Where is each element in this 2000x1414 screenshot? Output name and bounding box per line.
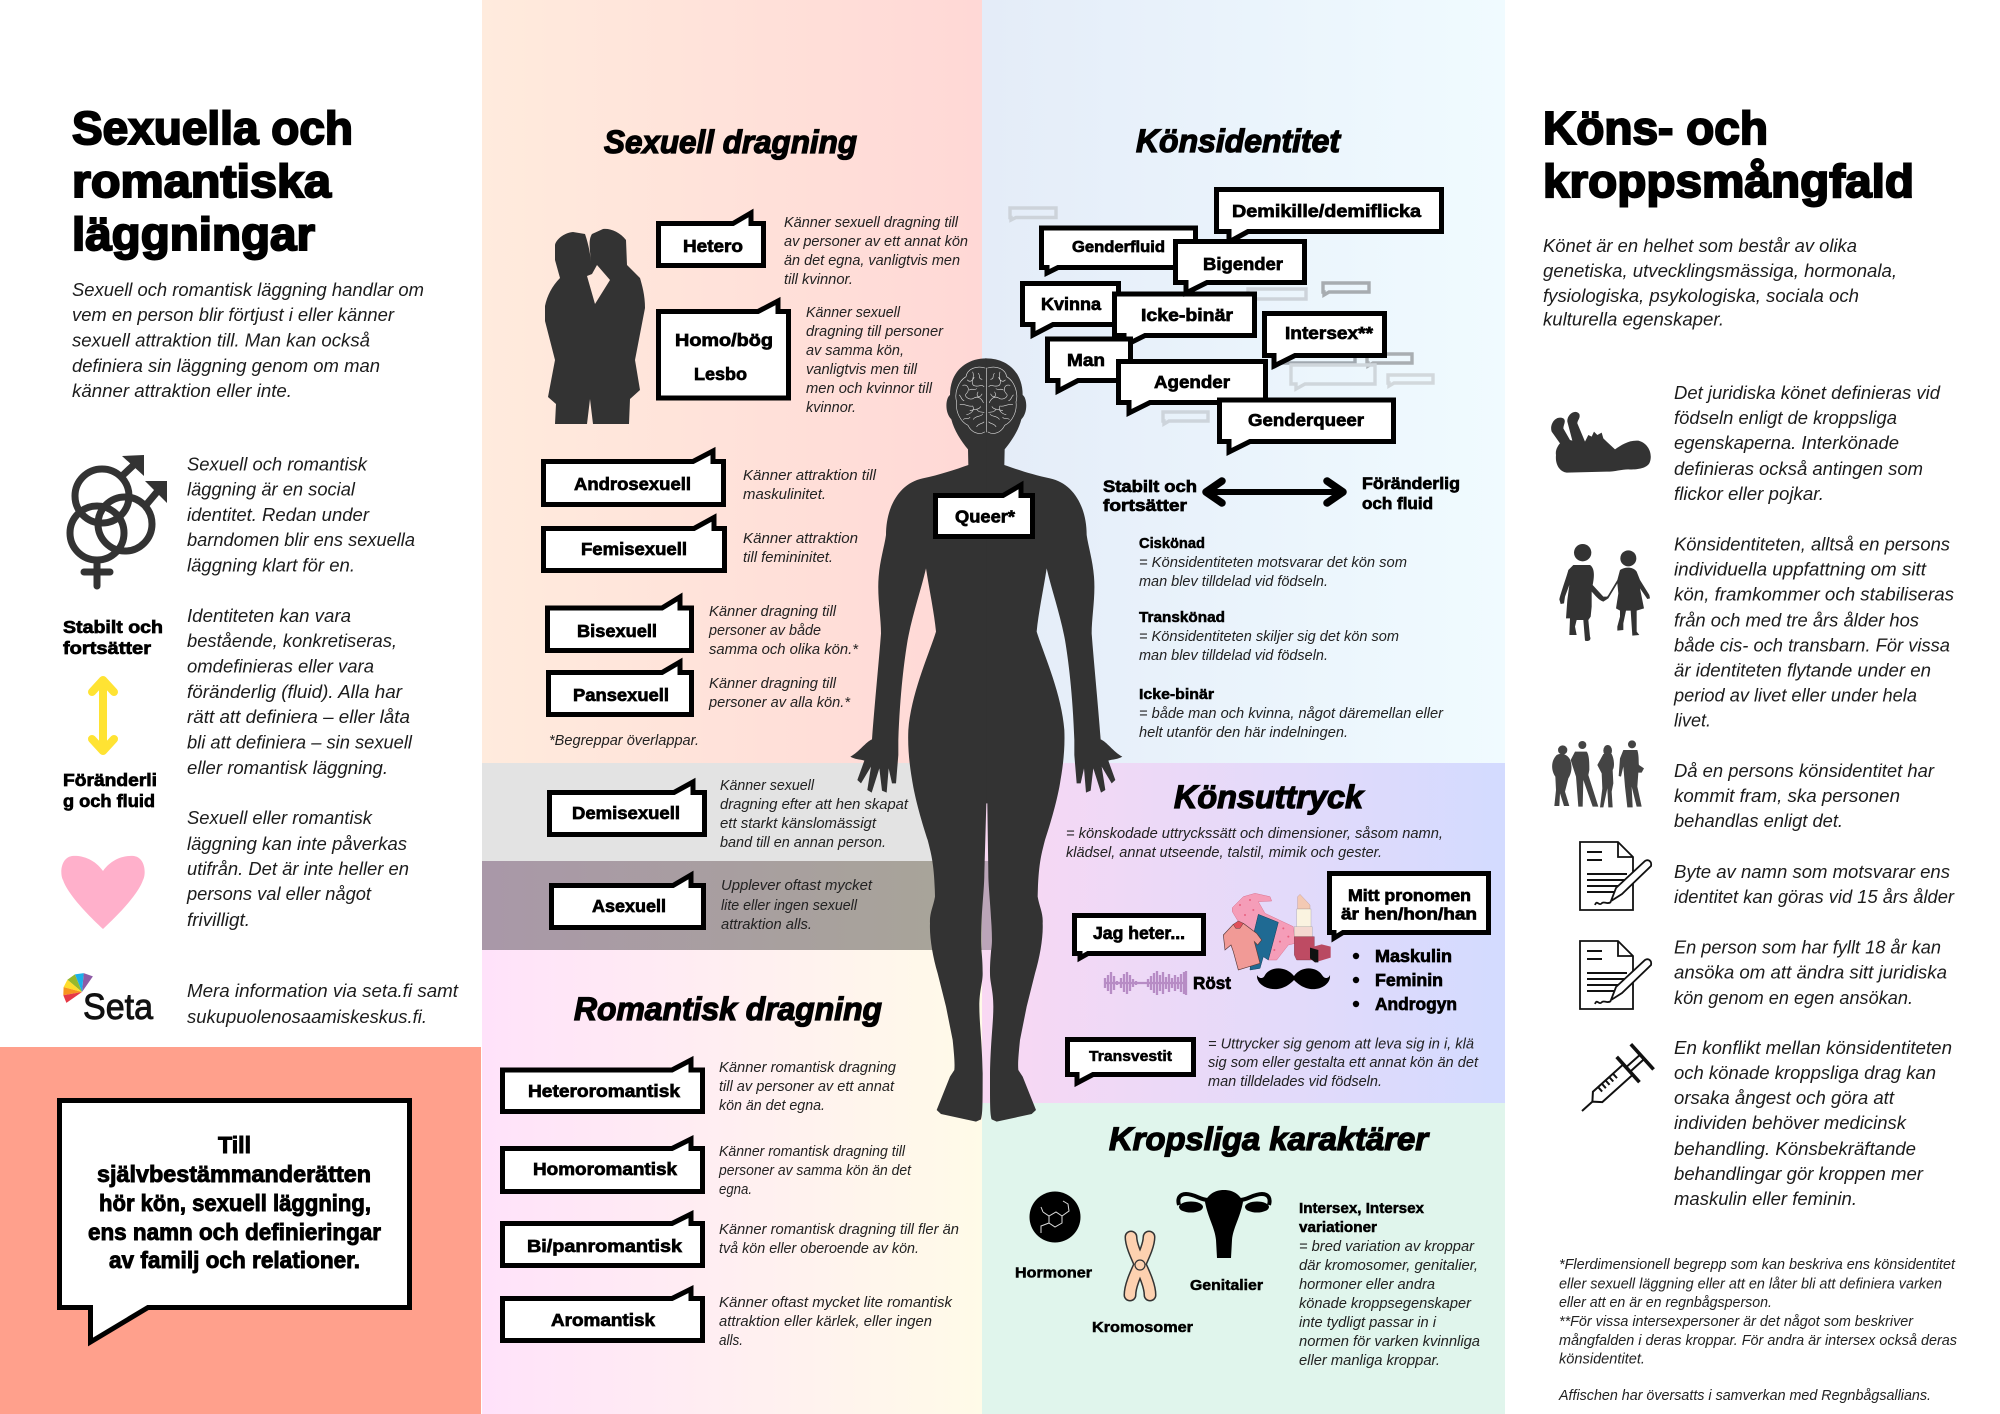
- text block: intro right: genetiska, utvecklingsmässiga, hormonala,: [1543, 261, 1897, 281]
- bubble: Transvestit: [1068, 1040, 1194, 1083]
- list: expression types: Feminin: [1375, 970, 1443, 990]
- text: Pansexuell description: personer av alla kön.*: [708, 695, 851, 711]
- text block: treatment: kommit fram, ska personen: [1674, 786, 1900, 806]
- text block: gender confirming treatment: individen behöver medicinsk: [1674, 1113, 1907, 1133]
- text block: gender identity: är identiteten flytande under en: [1674, 660, 1931, 680]
- footnotes: *Flerdimensionell begrepp som kan beskriva ens könsidentitet: [1559, 1257, 1956, 1273]
- text block: intro right: kulturella egenskaper.: [1543, 310, 1724, 330]
- text: Aromantisk description: alls.: [719, 1333, 743, 1349]
- heading: Sexuell dragning: Sexuell dragning: [604, 124, 857, 160]
- text: Demisexuell description: dragning efter att hen skapat: [720, 797, 909, 813]
- bubble: Asexuell: Asexuell: [592, 896, 666, 916]
- text block: intro left: Sexuell och romantisk läggning handlar om: [72, 280, 424, 300]
- text: intersex definition: inte tydligt passar in i: [1299, 1315, 1437, 1331]
- text block: cannot be influenced: läggning kan inte påverkas: [187, 834, 407, 854]
- text: Bisexuell description: [708, 604, 859, 658]
- text: Pansexuell description: Känner dragning till: [709, 676, 837, 692]
- bubble: Aromantisk: [502, 1289, 702, 1340]
- callout: self-determination: [60, 1100, 410, 1342]
- text block: social identity: [187, 454, 415, 576]
- text block: identity can vary: Identiteten kan vara: [187, 606, 351, 626]
- bubble: Bi/panromantisk: [502, 1214, 702, 1266]
- definition: Icke-binär: Icke-binär: [1139, 687, 1214, 703]
- footnotes: Affischen har översatts i samverkan med Regnbågsallians.: [1558, 1388, 1931, 1404]
- title: left column: läggningar: [72, 208, 315, 260]
- footnote: overlapping terms: *Begreppar överlappar.: [549, 733, 699, 749]
- text block: social identity: barndomen blir ens sexuella: [187, 530, 415, 550]
- arrow: yellow double arrow: [92, 680, 114, 751]
- footnotes: **För vissa intersexpersoner är det något som beskriver: [1559, 1314, 1914, 1330]
- bubble: Queer: Queer*: [955, 506, 1015, 526]
- text: intersex definition: [1299, 1201, 1480, 1369]
- text: Femisexuell description: [743, 531, 858, 566]
- label: Hormoner: Hormoner: [1015, 1266, 1092, 1282]
- bubble: Homoromantisk: [502, 1139, 702, 1192]
- bubble: Asexuell: [552, 875, 704, 928]
- text: Hetero description: än det egna, vanligtvis men: [784, 253, 960, 269]
- bubble: Icke-binär: Icke-binär: [1141, 305, 1233, 325]
- label: stable: [63, 617, 163, 658]
- text block: name change: [1674, 862, 1955, 907]
- panel: demisexual band: [482, 763, 982, 861]
- bubble: Man: Man: [1067, 350, 1105, 370]
- text: Hetero description: Känner sexuell dragning till: [784, 215, 959, 231]
- bubble: Femisexuell: [544, 518, 724, 570]
- text: Androsexuell description: Känner attraktion till: [743, 468, 877, 484]
- bubble: Homo/bög Lesbo: [658, 301, 788, 398]
- label: fluid: [63, 770, 157, 811]
- text: Bi/panromantisk description: [719, 1222, 959, 1257]
- text block: legal gender: [1674, 383, 1941, 504]
- text block: social identity: Sexuell och romantisk: [187, 454, 368, 474]
- text block: identity can vary: bli att definiera – sin sexuell: [187, 732, 413, 752]
- arrow: black double arrow: [1206, 481, 1343, 503]
- text block: intro left: vem en person blir förtjust i eller känner: [72, 305, 395, 325]
- heading: Kropsliga karaktärer: Kropsliga karaktärer: [1109, 1121, 1430, 1157]
- text block: intro left: sexuell attraktion till. Man kan också: [72, 330, 370, 350]
- panel: salmon callout background: [0, 1047, 481, 1414]
- text: intersex definition: Intersex, Intersex: [1299, 1201, 1424, 1217]
- text: gender expression definition: = könskodade uttryckssätt och dimensioner, såsom namn,: [1066, 826, 1443, 842]
- list: expression types: [1353, 946, 1457, 1014]
- title: right column: kroppsmångfald: [1543, 155, 1914, 207]
- text block: legal gender: Det juridiska könet definieras vid: [1674, 383, 1941, 403]
- bubble: Queer: [936, 485, 1032, 536]
- text: Hetero description: [784, 215, 968, 288]
- text block: name change: Byte av namn som motsvarar ens: [1674, 862, 1950, 882]
- text: intersex definition: könade kroppsegenskaper: [1299, 1296, 1472, 1312]
- bubble: Heteroromantisk: Heteroromantisk: [528, 1081, 680, 1101]
- text: Homo description: [806, 305, 944, 416]
- text: Femisexuell description: till femininitet.: [743, 550, 833, 566]
- bubble: Jag heter: Jag heter...: [1093, 923, 1185, 943]
- icon: document with pen: [1580, 842, 1651, 910]
- text: intersex definition: hormoner eller andra: [1299, 1277, 1435, 1293]
- panel: bodily characteristics background: [982, 1103, 1505, 1414]
- definition: Icke-binär: helt utanför den här indelningen.: [1139, 725, 1348, 741]
- text block: intro right: [1543, 236, 1897, 330]
- text: intersex definition: normen för varken kvinnliga: [1299, 1334, 1480, 1350]
- text: intersex definition: där kromosomer, genitalier,: [1299, 1258, 1478, 1274]
- text: Demisexuell description: ett starkt känslomässigt: [720, 816, 877, 832]
- text block: legal gender application: En person som har fyllt 18 år kan: [1674, 938, 1941, 958]
- definition: Transkönad: man blev tilldelad vid födseln.: [1139, 648, 1328, 664]
- bubble: Pansexuell: [548, 662, 692, 714]
- text: Asexuell description: attraktion alls.: [721, 917, 812, 933]
- text: Androsexuell description: [743, 468, 877, 503]
- bubble: Homo/bög Lesbo: Homo/bög: [675, 330, 773, 350]
- footnotes: eller att en är en regnbågsperson.: [1559, 1295, 1772, 1311]
- text block: cannot be influenced: [186, 808, 409, 930]
- list: expression types: Androgyn: [1375, 994, 1457, 1014]
- text block: intro left: [72, 280, 424, 401]
- text: Demisexuell description: band till en annan person.: [720, 835, 886, 851]
- panel: gender identity background: [982, 0, 1505, 763]
- definition: Ciskönad: Ciskönad: [1139, 536, 1205, 552]
- list: expression types: Maskulin: [1375, 946, 1452, 966]
- text: Homoromantisk description: personer av samma kön än det: [718, 1163, 912, 1179]
- bubble: Genderfluid: [1042, 228, 1196, 273]
- logo: Seta: Seta: [83, 986, 154, 1027]
- bubble: Genderqueer: Genderqueer: [1248, 410, 1364, 430]
- text block: legal gender: flickor eller pojkar.: [1674, 484, 1824, 504]
- icon: brain: [956, 367, 1017, 433]
- text: Homoromantisk description: [718, 1144, 912, 1198]
- bubble: Agender: Agender: [1154, 372, 1230, 392]
- icon: baby: [1551, 412, 1651, 473]
- text: Bisexuell description: Känner dragning till: [709, 604, 837, 620]
- text block: identity can vary: eller romantisk läggning.: [187, 758, 388, 778]
- text: Transvestit description: = Uttrycker sig genom att leva sig in i, klä: [1208, 1036, 1474, 1052]
- text: Homo description: Känner sexuell: [806, 305, 901, 321]
- text block: intro right: fysiologiska, psykologiska, sociala och: [1543, 286, 1859, 306]
- label: fluid identity: [1362, 475, 1460, 513]
- text block: gender identity: livet.: [1674, 710, 1711, 730]
- bubble: Icke-binär: [1114, 294, 1254, 346]
- heading: Könsidentitet: Könsidentitet: [1136, 123, 1341, 159]
- label: Röst: Röst: [1193, 973, 1231, 993]
- text block: intro right: Könet är en helhet som består av olika: [1543, 236, 1857, 256]
- bubble: Demikille/demiflicka: [1216, 190, 1442, 242]
- heading: Romantisk dragning: Romantisk dragning: [574, 991, 882, 1027]
- bubble: Androsexuell: [544, 451, 724, 504]
- label: stable identity: Stabilt och: [1103, 478, 1197, 496]
- text block: gender confirming treatment: [1674, 1038, 1952, 1209]
- label: fluid: Föränderli: [63, 770, 157, 790]
- label: stable: fortsätter: [63, 638, 151, 658]
- ghost speech bubbles: [1010, 208, 1433, 424]
- bubble: Man: [1048, 339, 1130, 391]
- text block: gender identity: individuella uppfattning om sitt: [1674, 560, 1927, 580]
- text block: cannot be influenced: Sexuell eller romantisk: [187, 808, 373, 828]
- text block: legal gender application: [1674, 938, 1947, 1008]
- callout: self-determination: Till: [218, 1132, 251, 1158]
- bubble: Demisexuell: Demisexuell: [572, 803, 680, 823]
- text: Heteroromantisk description: [719, 1060, 896, 1114]
- panel: romantic attraction background: [482, 950, 982, 1414]
- label: stable identity: fortsätter: [1103, 497, 1188, 515]
- bubble: Demikille/demiflicka: Demikille/demiflicka: [1232, 201, 1421, 221]
- text block: legal gender: egenskaperna. Interkönade: [1674, 433, 1899, 453]
- title: right column: Köns- och: [1543, 102, 1768, 154]
- bubble: Homoromantisk: Homoromantisk: [533, 1159, 677, 1179]
- callout: self-determination: hör kön, sexuell läggning,: [99, 1190, 371, 1216]
- text block: identity can vary: rätt att definiera – eller låta: [187, 707, 410, 727]
- text: Pansexuell description: [708, 676, 851, 711]
- footnotes: eller sexuell läggning eller att en låter bli att definiera varken: [1559, 1276, 1942, 1292]
- text block: social identity: identitet. Redan under: [187, 505, 370, 525]
- footnotes: [1558, 1257, 1957, 1404]
- icon: gender symbols: [70, 455, 167, 586]
- footnotes: könsidentitet.: [1559, 1352, 1645, 1368]
- text: intersex definition: eller manliga kroppar.: [1299, 1353, 1440, 1369]
- text: Aromantisk description: Känner oftast mycket lite romantisk: [719, 1295, 953, 1311]
- text: Homo description: vanligtvis men till: [806, 362, 918, 378]
- text block: legal gender application: kön genom en egen ansökan.: [1674, 988, 1913, 1008]
- asexual band between legs: [982, 861, 991, 950]
- text: gender expression definition: [1066, 826, 1443, 861]
- icon: hormone molecule: [1030, 1192, 1080, 1242]
- text: gender expression definition: klädsel, annat utseende, talstil, mimik och gester.: [1066, 845, 1382, 861]
- text block: more information: Mera information via seta.fi samt: [187, 981, 459, 1001]
- bubble: Aromantisk: Aromantisk: [551, 1310, 655, 1330]
- text block: identity can vary: föränderlig (fluid). Alla har: [187, 682, 403, 702]
- bubble: Kvinna: Kvinna: [1041, 294, 1101, 314]
- bubble: Androsexuell: Androsexuell: [574, 474, 691, 494]
- label: Kromosomer: Kromosomer: [1092, 1320, 1193, 1336]
- icon: voice waveform: [1104, 971, 1187, 995]
- icon: children holding hands: [1559, 544, 1650, 641]
- text block: treatment: Då en persons könsidentitet har: [1674, 761, 1935, 781]
- heading: Könsuttryck: Könsuttryck: [1174, 779, 1365, 815]
- text: Hetero description: av personer av ett annat kön: [784, 234, 968, 250]
- text block: identity can vary: omdefinieras eller vara: [187, 656, 374, 676]
- text: Homo description: men och kvinnor till: [806, 381, 933, 397]
- bubble: Homo/bög Lesbo: Lesbo: [694, 364, 747, 384]
- icon: document with pen second: [1580, 941, 1651, 1009]
- bubble: Femisexuell: Femisexuell: [581, 539, 687, 559]
- text block: social identity: läggning är en social: [187, 480, 356, 500]
- text: Asexuell description: [721, 878, 873, 933]
- text block: name change: identitet kan göras vid 15 års ålder: [1674, 887, 1955, 907]
- text block: gender confirming treatment: En konflikt mellan könsidentiteten: [1674, 1038, 1952, 1058]
- bubble: Demisexuell: [550, 782, 704, 834]
- text: Bisexuell description: samma och olika kön.*: [709, 642, 859, 658]
- text: Androsexuell description: maskulinitet.: [743, 487, 826, 503]
- bubble: Pansexuell: Pansexuell: [573, 685, 669, 705]
- bubble: Bigender: Bigender: [1203, 254, 1283, 274]
- text block: cannot be influenced: persons val eller något: [186, 884, 372, 904]
- logo: Seta: [63, 973, 154, 1027]
- text block: legal gender application: ansöka om att ändra sitt juridiska: [1674, 962, 1947, 982]
- bubble: Mitt pronomen: [1330, 874, 1488, 938]
- text: Bi/panromantisk description: två kön eller oberoende av kön.: [719, 1241, 919, 1257]
- text block: gender identity: Könsidentiteten, alltså en persons: [1674, 534, 1950, 554]
- title: left column: [72, 102, 353, 260]
- callout: self-determination: av familj och relationer.: [109, 1247, 360, 1273]
- definition: Transkönad: [1139, 610, 1399, 664]
- bubble: Intersex**: Intersex**: [1285, 323, 1373, 343]
- bubble: Bisexuell: [548, 597, 692, 650]
- text: Heteroromantisk description: Känner romantisk dragning: [719, 1060, 896, 1076]
- text: Aromantisk description: attraktion eller kärlek, eller ingen: [719, 1314, 932, 1330]
- text block: intro left: känner attraktion eller inte.: [72, 381, 292, 401]
- text: Demisexuell description: Känner sexuell: [720, 778, 815, 794]
- text block: legal gender: födseln enligt de kroppsliga: [1674, 408, 1897, 428]
- label: Genitalier: Genitalier: [1190, 1278, 1263, 1294]
- text: Heteroromantisk description: till av personer av ett annat: [719, 1079, 895, 1095]
- panel: gender expression background: [982, 763, 1505, 1103]
- text block: social identity: läggning klart för en.: [187, 556, 355, 576]
- callout: self-determination: självbestämmanderätten: [97, 1161, 371, 1187]
- text: Asexuell description: Upplever oftast mycket: [721, 878, 873, 894]
- definition: Ciskönad: [1139, 536, 1407, 590]
- bubble: Hetero: Hetero: [683, 236, 743, 256]
- bubble: Bigender: [1176, 242, 1304, 293]
- body silhouette: [850, 358, 1122, 1122]
- text block: treatment: behandlas enligt det.: [1674, 811, 1843, 831]
- text block: gender identity: kön, framkommer och stabiliseras: [1674, 584, 1954, 604]
- definition: Icke-binär: = både man och kvinna, något däremellan eller: [1139, 706, 1444, 722]
- callout: self-determination: ens namn och definieringar: [88, 1219, 381, 1245]
- bubble: Mitt pronomen: är hen/hon/han: [1341, 906, 1477, 924]
- label: stable: Stabilt och: [63, 617, 163, 637]
- bubble: Heteroromantisk: [502, 1060, 702, 1112]
- definition: Ciskönad: man blev tilldelad vid födseln.: [1139, 574, 1328, 590]
- text block: gender identity: [1673, 534, 1954, 730]
- text: Transvestit description: sig som eller gestalta ett annat kön än det: [1208, 1055, 1479, 1071]
- text block: gender identity: period av livet eller under hela: [1673, 686, 1917, 706]
- text: intersex definition: variationer: [1299, 1220, 1377, 1236]
- text: Homo description: av samma kön,: [806, 343, 904, 359]
- definition: Transkönad: = Könsidentiteten skiljer sig det kön som: [1139, 629, 1399, 645]
- bubble: Intersex**: [1264, 314, 1384, 366]
- text: Femisexuell description: Känner attraktion: [743, 531, 858, 547]
- text: Heteroromantisk description: kön än det egna.: [719, 1098, 825, 1114]
- text block: cannot be influenced: frivilligt.: [187, 910, 250, 930]
- bubble: Hetero: [658, 213, 764, 266]
- icon: group of people: [1552, 740, 1644, 807]
- text: Bi/panromantisk description: Känner romantisk dragning till fler än: [719, 1222, 959, 1238]
- text block: gender confirming treatment: behandlingar gör kroppen mer: [1674, 1164, 1924, 1184]
- definition: Transkönad: Transkönad: [1139, 610, 1225, 626]
- label: fluid identity: och fluid: [1362, 495, 1433, 513]
- icon: syringe: [1571, 1044, 1654, 1124]
- text: Homo description: kvinnor.: [806, 400, 856, 416]
- icon: kissing couple silhouette: [545, 229, 645, 424]
- text: Homoromantisk description: Känner romantisk dragning till: [719, 1144, 906, 1160]
- text block: legal gender: definieras också antingen som: [1674, 459, 1923, 479]
- text block: gender confirming treatment: och könade kroppsliga drag kan: [1674, 1063, 1936, 1083]
- footnotes: mångfalden i deras kroppar. För andra är intersex också deras: [1559, 1333, 1957, 1349]
- bubble: Agender: [1118, 362, 1266, 413]
- definition: Ciskönad: = Könsidentiteten motsvarar det kön som: [1139, 555, 1407, 571]
- bubble: Genderqueer: [1220, 400, 1394, 452]
- bubble: Kvinna: [1022, 284, 1118, 335]
- text block: identity can vary: bestående, konkretiseras,: [187, 631, 397, 651]
- text block: treatment: [1674, 761, 1935, 831]
- label: fluid identity: Föränderlig: [1362, 475, 1460, 493]
- text: Hetero description: till kvinnor.: [784, 272, 853, 288]
- text: Bisexuell description: personer av både: [708, 623, 821, 639]
- bubble: Bisexuell: Bisexuell: [577, 621, 657, 641]
- icon: mustache: [1257, 968, 1330, 989]
- text block: gender identity: från och med tre års ålder hos: [1674, 610, 1919, 630]
- title: left column: Sexuella och: [72, 102, 353, 154]
- bubble: Genderfluid: Genderfluid: [1072, 239, 1165, 256]
- label: fluid: g och fluid: [63, 791, 155, 811]
- bubble: Bi/panromantisk: Bi/panromantisk: [527, 1236, 682, 1256]
- text: Transvestit description: [1208, 1036, 1479, 1090]
- panel: sexual attraction background: [482, 0, 982, 763]
- text: Homoromantisk description: egna.: [719, 1182, 752, 1198]
- bubble: Jag heter: [1074, 916, 1204, 958]
- title: right column: [1543, 102, 1914, 207]
- icon: clothes and lipstick: [1223, 893, 1331, 970]
- text block: more information: [187, 981, 459, 1027]
- text block: gender confirming treatment: behandling. Könsbekräftande: [1674, 1139, 1916, 1159]
- text block: identity can vary: [187, 606, 413, 778]
- text: Aromantisk description: [719, 1295, 953, 1349]
- text block: gender confirming treatment: orsaka ångest och göra att: [1674, 1088, 1895, 1108]
- text: Transvestit description: man tilldelades vid födseln.: [1208, 1074, 1382, 1090]
- text: Demisexuell description: [720, 778, 909, 851]
- text block: intro left: definiera sin läggning genom om man: [72, 356, 380, 376]
- bubble: Mitt pronomen: Mitt pronomen: [1348, 887, 1471, 905]
- icon: reproductive organs: [1178, 1190, 1270, 1258]
- text block: gender confirming treatment: maskulin eller feminin.: [1674, 1189, 1857, 1209]
- title: left column: romantiska: [72, 155, 331, 207]
- text block: more information: sukupuolenosaamiskeskus.fi.: [187, 1007, 427, 1027]
- panel: asexual band: [482, 861, 982, 950]
- text: intersex definition: = bred variation av kroppar: [1299, 1239, 1475, 1255]
- definition: Icke-binär: [1139, 687, 1444, 741]
- text: Homo description: dragning till personer: [806, 324, 944, 340]
- icon: heart: [61, 856, 145, 929]
- text: Asexuell description: lite eller ingen sexuell: [721, 898, 858, 914]
- text block: gender identity: både cis- och transbarn. För vissa: [1674, 636, 1950, 656]
- bubble: Transvestit: Transvestit: [1089, 1049, 1172, 1065]
- icon: chromosome: [1130, 1237, 1150, 1295]
- label: stable identity: [1103, 478, 1197, 515]
- text block: cannot be influenced: utifrån. Det är inte heller en: [187, 859, 409, 879]
